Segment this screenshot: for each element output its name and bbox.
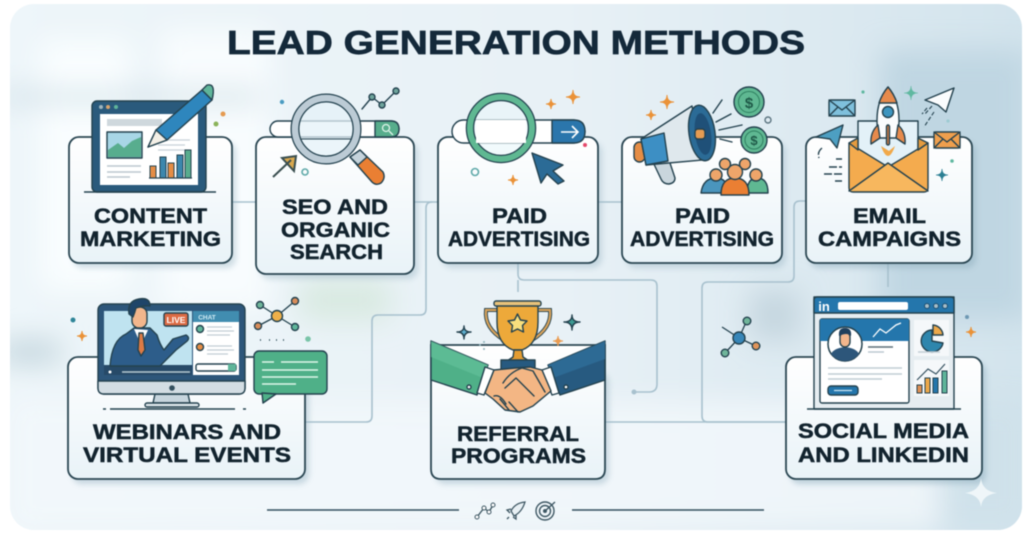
label: email campaigns: EMAIL [853,205,926,228]
icon: megaphone, coins and audience: $ [745,95,754,112]
panel: email campaigns [806,86,976,268]
label: paid advertising second: PAID [675,205,730,228]
icon: linkedin profile window: in [818,299,830,314]
label: referral programs [451,423,586,468]
label: paid advertising second [630,205,774,251]
label: email campaigns: CAMPAIGNS [818,228,961,251]
icon: megaphone, coins and audience [634,87,771,195]
icon: target [536,502,555,520]
label: content marketing [80,205,221,251]
label: SEO and organic search: ORGANIC [281,219,390,242]
icon: monitor with presenter and chat [70,298,327,409]
label: referral programs: REFERRAL [457,423,579,446]
icon: trend line [475,503,495,519]
title: LEAD GENERATION METHODS [227,24,805,61]
icon: envelope, rocket and planes [816,86,960,192]
label: social media and linkedin [798,420,969,467]
connector lines [232,201,888,422]
icon: trophy and handshake [431,301,605,412]
icon: megaphone, coins and audience: $ [750,133,758,148]
icon: laptop and pen [84,85,226,192]
panel: paid advertising search [438,90,602,268]
panel: content marketing [69,85,236,268]
icon: network nodes [721,317,760,357]
panel: SEO and organic search [256,88,418,279]
label: social media and linkedin: SOCIAL MEDIA [798,420,969,443]
label: SEO and organic search [281,196,390,264]
footer divider with icons [267,502,764,520]
panel: webinars and virtual events [68,298,327,484]
label: referral programs: PROGRAMS [451,445,586,468]
label: content marketing: CONTENT [94,205,207,228]
label: paid advertising: PAID [492,205,547,228]
icon: monitor with presenter and chat: CHAT [198,314,216,322]
label: webinars and virtual events [83,421,291,467]
sparkle watermark [965,478,997,507]
label: webinars and virtual events: VIRTUAL EVENTS [83,444,291,467]
icon: linkedin profile window [807,297,976,409]
label: paid advertising [448,205,590,251]
label: paid advertising second: ADVERTISING [630,228,774,251]
label: social media and linkedin: AND LINKEDIN [798,444,969,467]
icon: search bar, ring and cursor [452,90,587,185]
icon: small rocket [507,502,525,519]
panel: referral programs [431,301,609,484]
label: content marketing: MARKETING [80,228,221,251]
panel: social media and linkedin [786,297,986,484]
panel: paid advertising megaphone [622,87,786,268]
label: SEO and organic search: SEARCH [290,241,383,264]
label: webinars and virtual events: WEBINARS AND [93,421,281,444]
label: SEO and organic search: SEO AND [282,196,388,219]
icon: magnifier over search bar [270,88,399,184]
icon: monitor with presenter and chat: LIVE [167,315,186,325]
label: email campaigns [818,205,961,251]
label: paid advertising: ADVERTISING [448,228,590,251]
